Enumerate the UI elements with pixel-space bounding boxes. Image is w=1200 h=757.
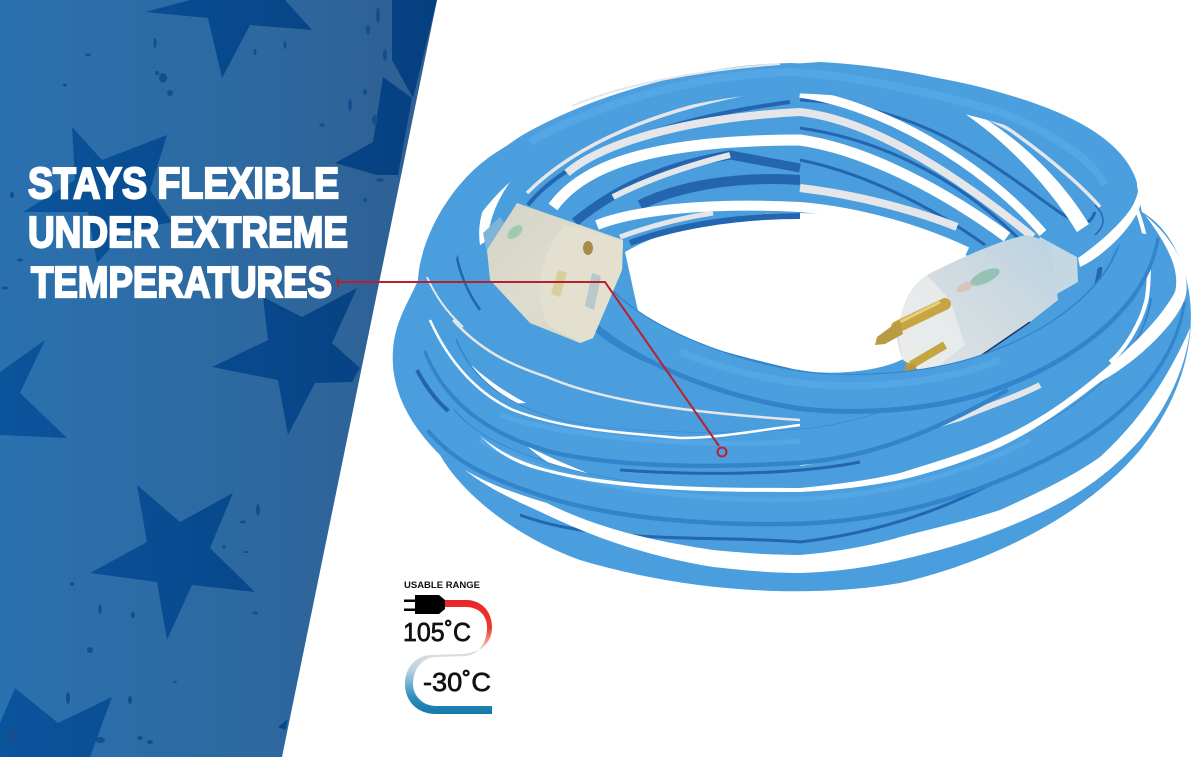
ring two [440,210,1187,508]
grunge specks [2,7,387,744]
ring three [427,277,1000,473]
back coil white stripes [479,85,1100,252]
icon: gradient cord [405,600,492,714]
plug pins [875,302,945,376]
icon: usable temperature range: USABLE RANGE [404,580,480,591]
icon: usable temperature range: 105˚C [403,617,471,647]
socket slots [551,270,567,297]
plug cable behind [590,300,800,389]
callout leader line [338,278,726,456]
stars [0,0,437,757]
heading: UNDER EXTREME [28,208,348,257]
male plug [875,235,1078,376]
heading [28,159,348,307]
panel: blue star background [0,0,437,757]
coil silhouette [393,62,1191,591]
female socket [483,203,623,343]
icon: black plug [404,595,445,614]
top loop cable [437,64,1141,272]
heading: TEMPERATURES [31,258,332,307]
icon: usable temperature range [403,580,492,714]
icon: usable temperature range: -30˚C [423,667,491,697]
lower left details [417,310,1190,573]
bottom white stripe [465,328,1190,573]
right inner thin stripe [1110,210,1149,362]
socket ground hole [583,241,593,255]
back coil shadows [453,100,1100,323]
heading: STAYS FLEXIBLE [28,159,339,208]
product photo: coiled blue and white extension cord [393,62,1191,591]
front cable [600,233,1140,394]
